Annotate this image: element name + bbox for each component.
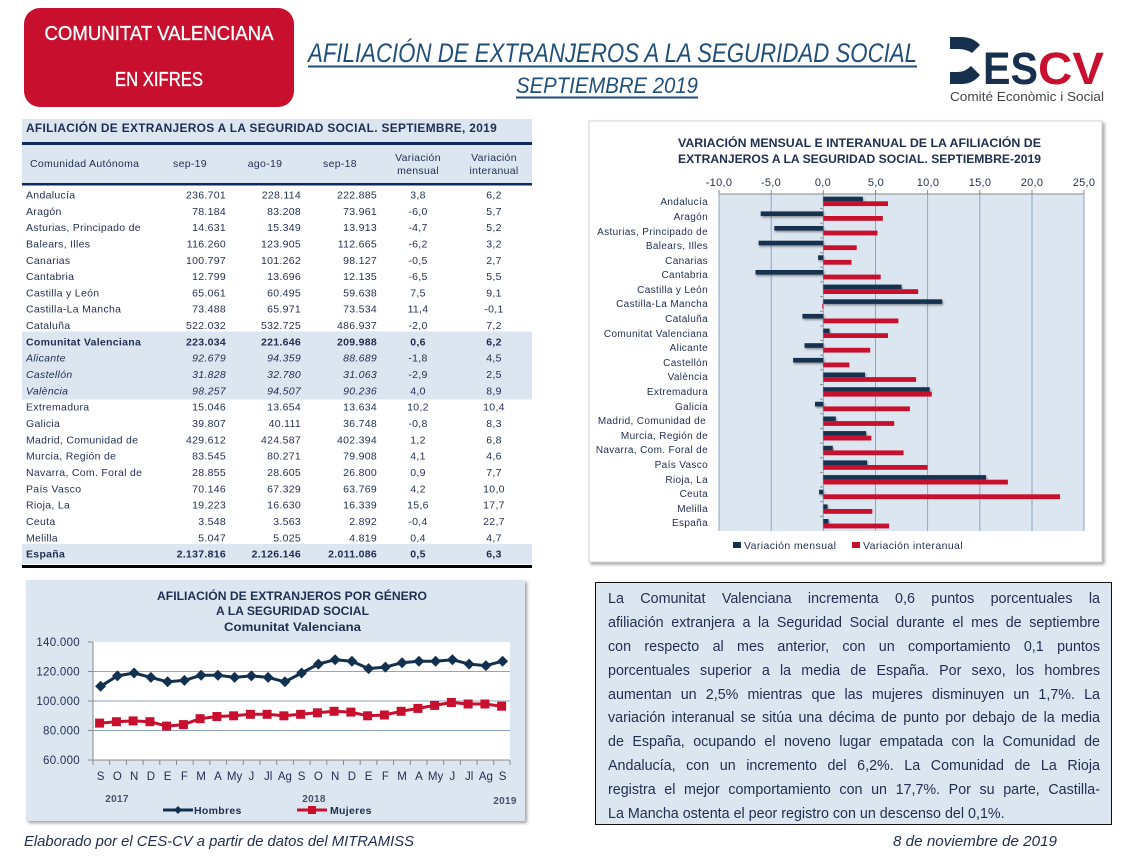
category labels: País Vasco (655, 460, 708, 471)
row: Melilla: 5.047 (198, 532, 226, 544)
row: València (26, 385, 502, 397)
month labels: N (331, 771, 339, 783)
x axis labels: 5,0 (868, 177, 884, 189)
row: Asturias: Asturias, Principado de (26, 222, 141, 234)
row: Andalucía: 222.885 (337, 190, 377, 202)
month labels: O (113, 771, 122, 783)
row: Madrid: 1,2 (410, 434, 426, 446)
row: Castellón: 32.780 (267, 369, 301, 381)
row: Alicante: 88.689 (343, 353, 377, 365)
row: Cataluña: 7,2 (486, 320, 502, 332)
row: País Vasco: 70.146 (192, 483, 226, 495)
row: Navarra: Navarra, Com. Foral de (26, 467, 142, 479)
row: Melilla: 4,7 (486, 532, 502, 544)
row: Murcia: 79.908 (343, 451, 377, 463)
row: Extremadura: 15.046 (192, 402, 226, 414)
row: València: 8,9 (486, 385, 502, 397)
year labels: 2017 (105, 794, 129, 805)
row: Castilla y León: Castilla y León (26, 287, 99, 299)
row: Alicante: Alicante (25, 353, 66, 365)
table header: interanual (469, 165, 519, 177)
table title: AFILIACIÓN DE EXTRANJEROS A LA SEGURIDAD SOCIAL. SEPTIEMBRE, 2019 (26, 122, 497, 135)
row: Ceuta: 22,7 (483, 516, 505, 528)
row: España: 2.126.146 (252, 549, 301, 561)
row: España: España (26, 549, 65, 561)
row: Canarias: 2,7 (486, 255, 502, 267)
x axis labels: -10,0 (706, 177, 732, 189)
month labels: Jl (264, 771, 272, 783)
row: Balears: -6,2 (408, 238, 428, 250)
row: València: 4,0 (410, 385, 426, 397)
row: Andalucía: 3,8 (410, 190, 426, 202)
row: Galicia: 39.807 (192, 418, 226, 430)
text block: commentary: La Comunitat Valenciana incrementa 0,6 puntos porcentuales la (608, 591, 1100, 607)
row: Cantabria: Cantabria (26, 271, 74, 283)
row: Asturias: 13.913 (343, 222, 377, 234)
table header (30, 152, 519, 177)
row: Extremadura: 13.634 (343, 402, 377, 414)
plot area (88, 642, 510, 765)
category labels: Comunitat Valenciana (604, 329, 708, 340)
footer: source: Elaborado por el CES-CV a partir de datos del MITRAMISS (24, 833, 414, 850)
row: Cantabria: 12.799 (192, 271, 226, 283)
row: Canarias (26, 255, 502, 267)
year labels: 2019 (493, 796, 517, 807)
bar chart title: EXTRANJEROS A LA SEGURIDAD SOCIAL. SEPTIEMBRE-2019 (678, 154, 1041, 166)
row: Melilla: 5.025 (273, 532, 301, 544)
row: Madrid: 402.394 (337, 434, 377, 446)
x axis labels (706, 177, 1095, 189)
row: Extremadura: 10,4 (483, 402, 505, 414)
row: Murcia: 4,1 (410, 451, 426, 463)
category labels: Murcia, Región de (621, 431, 708, 442)
badge: Comunitat Valenciana en xifres (24, 8, 294, 107)
row: Cataluña: 486.937 (337, 320, 377, 332)
y axis labels (36, 637, 80, 767)
bar chart title: VARIACIÓN MENSUAL E INTERANUAL DE LA AFILIACIÓN DE (678, 137, 1041, 150)
table header: sep-19 (173, 158, 207, 170)
y axis labels: 140.000 (36, 637, 80, 649)
row: Rioja: 16.339 (343, 500, 377, 512)
row: Canarias: -0,5 (408, 255, 428, 267)
row: Balears (26, 238, 502, 250)
footer: date: 8 de noviembre de 2019 (893, 833, 1058, 850)
row: Castilla-La Mancha: Castilla-La Mancha (26, 304, 121, 316)
row: Madrid: Madrid, Comunidad de (26, 434, 138, 446)
row: Galicia: Galicia (26, 418, 60, 430)
month labels: E (365, 771, 373, 783)
text block: commentary: porcentuales superior a la media de España. Por sexo, los hombres (608, 663, 1100, 679)
row: Extremadura: 10,2 (407, 402, 429, 414)
row: València: València (26, 385, 68, 397)
row: Ceuta: Ceuta (26, 516, 56, 528)
row: País Vasco (26, 483, 505, 495)
month labels: My (428, 771, 444, 783)
row: Alicante: 94.359 (267, 353, 301, 365)
row: Extremadura: Extremadura (26, 402, 89, 414)
text block: commentary (595, 582, 1112, 825)
row: España: 2.137.816 (177, 549, 226, 561)
row: Canarias: 98.127 (343, 255, 377, 267)
row: Castilla y León (26, 287, 502, 299)
month labels: S (97, 771, 105, 783)
row: Melilla: 0,4 (410, 532, 426, 544)
row: Castilla y León: 7,5 (410, 287, 426, 299)
text block: commentary: registra el mejor comportamiento con un 17,7%. Por su parte, Castilla- (608, 782, 1100, 798)
month labels: Jl (465, 771, 473, 783)
month labels: O (314, 771, 323, 783)
row: Alicante: 92.679 (192, 353, 226, 365)
panel: bar chart of monthly and yearly variation (589, 121, 1102, 562)
row: Comunitat Valenciana: Comunitat Valenciana (26, 336, 141, 348)
row: Comunitat Valenciana (26, 336, 502, 348)
row: Andalucía: 6,2 (486, 190, 502, 202)
y axis labels: 80.000 (43, 726, 80, 738)
line: mujeres (100, 702, 502, 726)
title (306, 37, 917, 98)
row: Murcia: 4,6 (486, 451, 502, 463)
row: Galicia: -0,8 (408, 418, 428, 430)
category labels: Cataluña (665, 314, 708, 325)
month labels: D (348, 771, 356, 783)
row: Extremadura (26, 402, 505, 414)
y axis labels: 100.000 (36, 696, 80, 708)
table header: sep-18 (323, 158, 357, 170)
row: Castilla y León: 60.495 (267, 287, 301, 299)
bar chart legend: Variación interanual (863, 540, 963, 552)
row: Rioja: 16.630 (267, 500, 301, 512)
line chart title (157, 590, 427, 634)
row: Balears: Balears, Illes (26, 238, 90, 250)
row: Aragón (26, 206, 502, 218)
category labels: Balears, Illes (646, 241, 708, 252)
row: Canarias: 100.797 (186, 255, 226, 267)
row: Galicia: 36.748 (343, 418, 377, 430)
row: Comunitat Valenciana: 6,2 (486, 336, 502, 348)
row: Madrid (26, 434, 502, 446)
row: Castellón: 2,5 (486, 369, 502, 381)
row: Navarra (26, 467, 502, 479)
category labels: Asturias, Principado de (597, 227, 708, 238)
row: España (26, 549, 502, 561)
line chart legend: Hombres (194, 805, 242, 817)
row: Alicante: -1,8 (408, 353, 428, 365)
table header: Variación (471, 152, 517, 164)
logo: CESCV: CV (1038, 43, 1104, 94)
logo: CESCV: ES (983, 43, 1038, 94)
y axis labels: 120.000 (36, 666, 80, 678)
row: Navarra: 28.855 (192, 467, 226, 479)
row: Galicia: 8,3 (486, 418, 502, 430)
row: Canarias: 101.262 (261, 255, 301, 267)
table header: mensual (397, 165, 439, 177)
row: Galicia (26, 418, 502, 430)
x axis labels: 25,0 (1073, 177, 1095, 189)
bar chart title (678, 137, 1041, 166)
row: Ceuta: 2.892 (349, 516, 377, 528)
series: variación mensual (756, 197, 986, 524)
row: Castilla-La Mancha (26, 304, 504, 316)
row: Asturias: -4,7 (408, 222, 428, 234)
row: Andalucía: 236.701 (186, 190, 226, 202)
row: Balears: 112.665 (338, 238, 377, 250)
row: Castellón: -2,9 (408, 369, 428, 381)
x axis labels: 20,0 (1021, 177, 1043, 189)
title: AFILIACIÓN DE EXTRANJEROS A LA SEGURIDAD SOCIAL (306, 37, 917, 68)
category labels: Melilla (677, 504, 708, 515)
row: Asturias (26, 222, 502, 234)
y axis labels: 60.000 (43, 755, 80, 767)
row: Comunitat Valenciana: 223.034 (186, 336, 226, 348)
category labels: Rioja, La (665, 475, 708, 486)
row: Castilla y León: 9,1 (486, 287, 502, 299)
row: País Vasco: País Vasco (26, 483, 81, 495)
text block: commentary: afiliación extranjera a la Seguridad Social durante el mes de septiembre (608, 615, 1100, 631)
text block: commentary: aumentan un 2,5% mientras que las mujeres disminuyen un 1,7%. La (608, 687, 1100, 703)
category labels: Castilla y León (637, 285, 708, 296)
row: Cantabria: 13.696 (267, 271, 301, 283)
row: Castellón (26, 369, 502, 381)
row: Extremadura: 13.654 (267, 402, 301, 414)
bar chart legend: Variación mensual (744, 540, 836, 552)
row: Murcia (26, 451, 502, 463)
text block: commentary: de España, ocupando el noveno lugar empatada con la Comunidad de (608, 734, 1100, 750)
row: Balears: 116.260 (187, 238, 226, 250)
text block: commentary: variación interanual se sitúa una décima de punto por debajo de la media (608, 710, 1100, 726)
row: Ceuta (26, 516, 505, 528)
plot area and grid (719, 190, 1084, 531)
category labels: Alicante (670, 343, 708, 354)
month labels: M (397, 771, 407, 783)
row: València: 98.257 (192, 385, 227, 397)
row: Aragón: 78.184 (192, 206, 226, 218)
row: Andalucía: Andalucía (26, 190, 75, 202)
row: Comunitat Valenciana: 221.646 (261, 336, 301, 348)
row: Cataluña: -2,0 (408, 320, 428, 332)
year labels (105, 794, 517, 807)
month labels: S (499, 771, 507, 783)
category labels: Extremadura (647, 387, 708, 398)
line chart title: A LA SEGURIDAD SOCIAL (216, 606, 369, 618)
month labels: A (214, 771, 222, 783)
row: Cantabria: 12.135 (343, 271, 377, 283)
category labels: Canarias (665, 256, 708, 267)
month labels: D (147, 771, 155, 783)
month labels: J (450, 771, 455, 783)
row: Aragón: Aragón (26, 206, 62, 218)
month labels: Ag (278, 771, 292, 783)
line chart title: Comunitat Valenciana (224, 622, 362, 634)
month labels: My (227, 771, 243, 783)
row: Aragón: -6,0 (408, 206, 428, 218)
row: Cataluña (26, 320, 502, 332)
row: Castilla-La Mancha: -0,1 (484, 304, 504, 316)
row: Cataluña: Cataluña (26, 320, 70, 332)
row: Madrid: 429.612 (186, 434, 226, 446)
table header: ago-19 (248, 158, 282, 170)
category labels: València (668, 372, 708, 383)
x axis labels: 15,0 (969, 177, 991, 189)
month labels: J (249, 771, 254, 783)
row: Castilla y León: 59.638 (343, 287, 377, 299)
row: Castilla-La Mancha: 73.488 (192, 304, 226, 316)
row: Navarra: 28.605 (267, 467, 301, 479)
month labels: E (164, 771, 172, 783)
row: Asturias: 14.631 (192, 222, 226, 234)
category labels: Cantabria (661, 270, 708, 281)
month labels: M (196, 771, 206, 783)
row: Castilla-La Mancha: 11,4 (408, 304, 428, 316)
row: Aragón: 73.961 (343, 206, 377, 218)
category labels (596, 197, 708, 529)
series: variación interanual (822, 201, 1060, 528)
line: hombres (101, 660, 503, 686)
row: España: 6,3 (486, 549, 502, 561)
row: País Vasco: 10,0 (483, 483, 505, 495)
x axis labels: 10,0 (917, 177, 939, 189)
row: Melilla: Melilla (26, 532, 58, 544)
row: Rioja: Rioja, La (26, 500, 70, 512)
row: Ceuta: 3.563 (273, 516, 301, 528)
row: Cataluña: 522.032 (186, 320, 226, 332)
row: Rioja: 15,6 (407, 500, 429, 512)
category labels: Madrid, Comunidad de (598, 416, 706, 427)
month labels: F (382, 771, 389, 783)
row: Castilla-La Mancha: 65.971 (267, 304, 301, 316)
row: Cataluña: 532.725 (261, 320, 301, 332)
row: Andalucía: 228.114 (262, 190, 301, 202)
badge: Comunitat Valenciana en xifres: COMUNITAT VALENCIANA (44, 23, 274, 45)
row: País Vasco: 67.329 (267, 483, 301, 495)
row: Cantabria: 5,5 (486, 271, 502, 283)
row: Comunitat Valenciana: 209.988 (337, 336, 377, 348)
category labels: Castellón (663, 358, 708, 369)
logo: CESCV: Comité Econòmic i Social (950, 89, 1104, 104)
row: Comunitat Valenciana: 0,6 (410, 336, 426, 348)
category labels: Castilla-La Mancha (616, 299, 708, 310)
category labels: Ceuta (680, 489, 708, 500)
line chart legend (163, 805, 372, 817)
row: Alicante: 4,5 (486, 353, 502, 365)
row: Rioja: 17,7 (483, 500, 505, 512)
month labels: N (130, 771, 138, 783)
category labels: Andalucía (660, 197, 708, 208)
row: València: 94.507 (267, 385, 302, 397)
row: Balears: 123.905 (261, 238, 301, 250)
month labels: A (415, 771, 423, 783)
text block: commentary: con respecto al mes anterior, con un comportamiento 0,1 puntos (608, 639, 1100, 655)
row: España: 0,5 (410, 549, 426, 561)
table header: Comunidad Autónoma (30, 158, 139, 170)
row: Ceuta: 3.548 (198, 516, 226, 528)
row: Castilla y León: 65.061 (192, 287, 226, 299)
month labels: Ag (479, 771, 493, 783)
row: Castellón: Castellón (26, 369, 72, 381)
badge: Comunitat Valenciana en xifres: EN XIFRES (115, 69, 203, 91)
row: Asturias: 15.349 (267, 222, 301, 234)
row: Rioja: 19.223 (192, 500, 226, 512)
row: Murcia: Murcia, Región de (26, 451, 116, 463)
row: País Vasco: 4,2 (410, 483, 426, 495)
row: Navarra: 7,7 (486, 467, 502, 479)
category labels: España (672, 518, 708, 529)
year labels: 2018 (302, 794, 326, 805)
row: Madrid: 424.587 (261, 434, 301, 446)
row: Navarra: 0,9 (410, 467, 426, 479)
row: Cantabria (26, 271, 502, 283)
row: Aragón: 5,7 (486, 206, 502, 218)
row: País Vasco: 63.769 (343, 483, 377, 495)
line chart title: AFILIACIÓN DE EXTRANJEROS POR GÉNERO (157, 590, 427, 603)
category labels: Navarra, Com. Foral de (596, 445, 708, 456)
row: Murcia: 80.271 (267, 451, 301, 463)
title: SEPTIEMBRE 2019 (516, 73, 698, 98)
row: Balears: 3,2 (486, 238, 502, 250)
row: Alicante (25, 353, 502, 365)
data table (22, 119, 532, 568)
category labels: Aragón (674, 212, 708, 223)
row: Madrid: 6,8 (486, 434, 502, 446)
row: Melilla (26, 532, 502, 544)
table header: Variación (395, 152, 441, 164)
row: Cantabria: -6,5 (408, 271, 428, 283)
panel: line chart by gender (26, 580, 525, 821)
row: Navarra: 26.800 (343, 467, 377, 479)
month labels (97, 771, 507, 783)
bar chart legend (733, 540, 963, 552)
text block: commentary: La Mancha ostenta el peor registro con un descenso del 0,1%. (608, 806, 1005, 822)
row: Asturias: 5,2 (486, 222, 502, 234)
row: Rioja (26, 500, 505, 512)
row: Melilla: 4.819 (349, 532, 377, 544)
month labels: S (298, 771, 306, 783)
month labels: F (181, 771, 188, 783)
row: Canarias: Canarias (26, 255, 70, 267)
row: Castellón: 31.828 (192, 369, 226, 381)
row: Aragón: 83.208 (267, 206, 301, 218)
row: España: 2.011.086 (328, 549, 377, 561)
x axis labels: 0,0 (815, 177, 831, 189)
row: Ceuta: -0,4 (408, 516, 428, 528)
row: València: 90.236 (343, 385, 377, 397)
line chart legend: Mujeres (330, 805, 372, 817)
text block: commentary: Andalucía, con un incremento del 6,2%. La Comunidad de La Rioja (608, 758, 1100, 774)
category labels: Galicia (675, 402, 708, 413)
x axis labels: -5,0 (761, 177, 781, 189)
row: Murcia: 83.545 (192, 451, 226, 463)
row: Andalucía (26, 190, 502, 202)
row: Galicia: 40.111 (269, 418, 301, 430)
row: Castellón: 31.063 (343, 369, 377, 381)
logo: CESCV (950, 37, 1104, 104)
row: Castilla-La Mancha: 73.534 (343, 304, 377, 316)
